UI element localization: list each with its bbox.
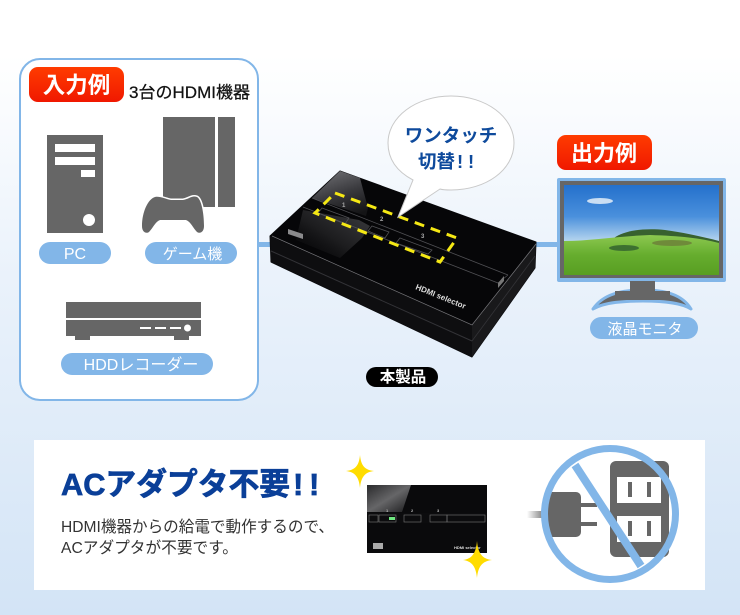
button numbers: 3 — [421, 234, 425, 240]
description — [61, 518, 334, 557]
photo: device front: 1 — [386, 508, 389, 513]
plug — [527, 492, 597, 537]
photo: device front: HDMI selector — [454, 545, 481, 550]
button numbers: 1 — [342, 203, 346, 209]
description: HDMI機器からの給電で動作するので、 — [61, 518, 334, 536]
outlet — [610, 461, 669, 557]
label: LCD monitor: 液晶モニタ — [607, 321, 683, 338]
device reflection — [296, 171, 370, 258]
speech bubble: ! — [457, 151, 463, 172]
icon: plug and outlet prohibited — [527, 448, 676, 580]
heading: ! — [293, 467, 303, 502]
icon: PC tower — [47, 135, 103, 233]
label: HDD recorder — [61, 353, 213, 375]
photo: device front — [367, 485, 487, 553]
label: game console: ゲーム機 — [163, 246, 222, 263]
panel: input examples — [20, 59, 258, 400]
badge: input example: 入力例 — [43, 73, 110, 98]
badge: input example — [29, 67, 124, 102]
heading: ACアダプタ不要 — [61, 467, 290, 502]
connector lines — [258, 242, 558, 247]
icon: monitor — [557, 178, 726, 309]
photo: device front: 3 — [437, 508, 440, 513]
photo: device front: 2 — [411, 508, 414, 513]
button numbers: 2 — [380, 217, 384, 223]
product: HDMI selector — [270, 171, 536, 357]
prohibition sign — [544, 448, 676, 580]
monitor screen landscape — [564, 185, 719, 275]
speech bubble: ワンタッチ — [405, 125, 497, 146]
speech bubble: ! — [468, 151, 474, 172]
label: PC: PC — [64, 246, 86, 263]
button numbers — [342, 203, 425, 240]
badge: output example — [557, 135, 652, 170]
label: LCD monitor — [590, 317, 698, 339]
icon: HDD recorder — [66, 302, 201, 340]
brand mark — [288, 229, 303, 239]
port highlight — [498, 276, 504, 288]
label: this product: 本製品 — [380, 368, 426, 386]
switch strip — [303, 198, 508, 283]
label: game console — [145, 242, 237, 264]
speech bubble: 切替 — [418, 151, 456, 172]
device label: HDMI selector — [414, 283, 467, 311]
icon: game console — [142, 117, 235, 233]
speech bubble — [388, 96, 514, 217]
label: HDD recorder: HDDレコーダー — [84, 356, 198, 374]
description: ACアダプタが不要です。 — [61, 539, 238, 557]
icon: sparkle bottom — [463, 541, 492, 578]
label: this product — [366, 367, 438, 387]
label: PC — [39, 242, 111, 264]
device top — [270, 171, 536, 325]
panel: no AC adapter — [34, 440, 705, 590]
monitor stand — [593, 290, 691, 309]
heading: ! — [309, 467, 319, 502]
icon: sparkle top — [346, 455, 374, 488]
text: three HDMI devices: 3台のHDMI機器 — [129, 83, 251, 102]
badge: output example: 出力例 — [571, 141, 637, 166]
yellow dashed selection — [315, 193, 457, 262]
device body — [270, 171, 536, 357]
